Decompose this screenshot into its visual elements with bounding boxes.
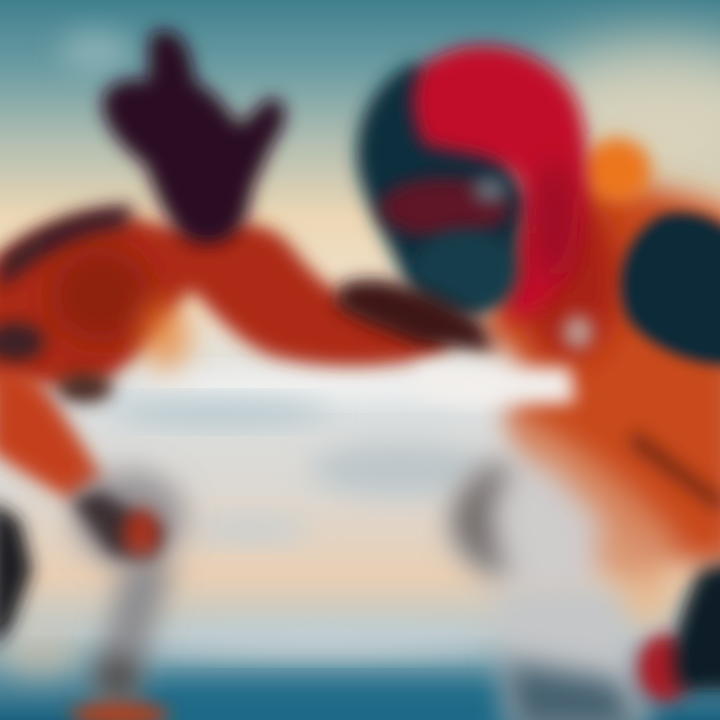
left fighter: raised dark glove <box>103 30 285 245</box>
right fighter: outstretched arm meeting opponent <box>335 279 495 352</box>
right fighter: helmet face shadow <box>379 178 511 238</box>
left fighter: elbow guard <box>0 322 45 362</box>
right fighter: red side shadow <box>520 200 620 360</box>
left fighter: orange highlight <box>141 301 189 369</box>
right fighter: dark jersey stripe <box>630 430 720 512</box>
left fighter: red knee accent <box>124 509 160 561</box>
right fighter: lower leg <box>495 590 650 720</box>
right fighter: red boot accent <box>637 634 693 702</box>
left fighter: waist shadow <box>57 373 113 403</box>
right fighter: knee shadow <box>453 460 510 580</box>
left fighter: dark red chest <box>50 247 150 343</box>
left fighter: ankle shadow <box>98 656 138 700</box>
left fighter: lower leg <box>95 560 175 700</box>
left fighter: shoulder shadow <box>0 205 135 290</box>
right fighter: orange shoulder crest <box>583 138 651 202</box>
left fighter: forearm <box>0 367 105 500</box>
left fighter: torso and arm <box>0 216 450 388</box>
right fighter: shin shadow <box>505 660 640 720</box>
right fighter: face mask highlight <box>474 178 506 202</box>
right fighter: white jersey patch <box>564 316 592 348</box>
right fighter: helmet red shading <box>533 160 577 280</box>
right fighter: rear dark leg <box>674 560 720 690</box>
left fighter: rear leg <box>0 500 32 650</box>
figure: left fighter <box>0 30 450 720</box>
right fighter: helmet dark teal side <box>357 62 530 310</box>
left fighter: glove on knee <box>70 490 165 565</box>
left fighter: grey knee pad <box>74 470 186 566</box>
right fighter: dark shoulder pad <box>620 212 720 366</box>
right fighter: white waist band <box>415 365 575 408</box>
left fighter: boot <box>70 703 170 720</box>
right fighter: grey knee <box>449 455 600 600</box>
right fighter: body <box>480 182 720 563</box>
right fighter: hip and thigh <box>510 410 680 580</box>
right fighter: helmet red shell <box>414 46 587 318</box>
right fighter: jaw guard <box>413 230 517 314</box>
figure: right fighter <box>335 46 720 720</box>
